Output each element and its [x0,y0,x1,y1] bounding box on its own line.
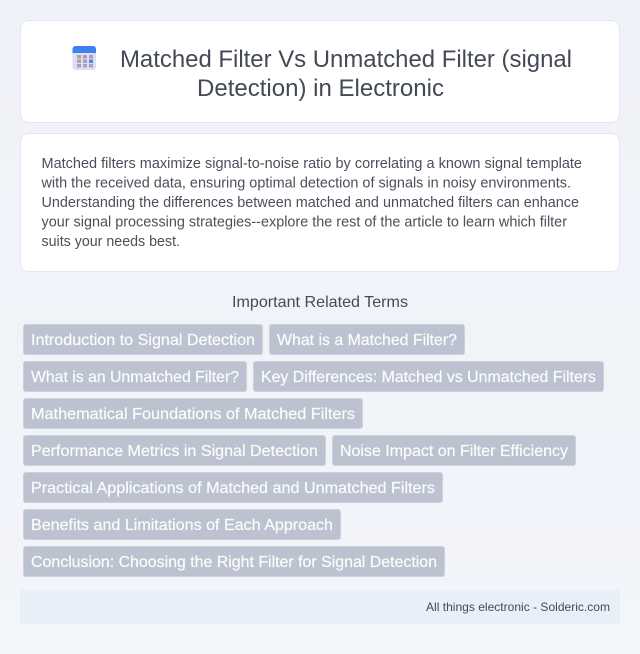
tag: noise impact [332,436,576,466]
heading: important related terms: Important Related Terms [232,294,408,311]
tag: conclusion [24,546,444,576]
tag: benefits and limitations [24,510,340,540]
title [120,46,572,102]
footer [20,590,620,624]
summary text [40,156,582,250]
tag: key differences [254,362,604,392]
tag: unmatched filter: What is an Unmatched Filter? [31,369,239,386]
summary text: Matched filters maximize signal-to-noise ratio by correlating a known signal template [42,156,582,172]
summary text: Understanding the differences between matched and unmatched filters can enhance [42,195,579,211]
tag: performance metrics: Performance Metrics in Signal Detection [31,443,318,460]
tag: matched filter [270,324,464,354]
tag: matched filter: What is a Matched Filter? [277,332,457,349]
title: Matched Filter Vs Unmatched Filter (signal [120,46,572,73]
tag: practical applications [24,472,442,502]
tag: conclusion: Conclusion: Choosing the Right Filter for Signal Detection [31,554,437,571]
title: Detection) in Electronic [197,75,444,102]
tag list [24,324,604,576]
summary text: with the received data, ensuring optimal detection of signals in noisy environments. [40,176,571,192]
tag: introduction [24,324,262,354]
summary text: your signal processing strategies--explore the rest of the article to learn which filter [42,214,567,230]
tag: noise impact: Noise Impact on Filter Efficiency [340,443,568,460]
tag: benefits and limitations: Benefits and Limitations of Each Approach [31,517,333,534]
tag: practical applications: Practical Applications of Matched and Unmatched Filters [31,480,435,497]
summary text: suits your needs best. [42,234,180,250]
tag: mathematical foundations: Mathematical Foundations of Matched Filters [31,406,355,423]
icon: calendar [72,46,96,70]
panel: title card [20,20,620,122]
tag: unmatched filter [24,362,246,392]
tag: key differences: Key Differences: Matched vs Unmatched Filters [261,369,596,386]
tag: mathematical foundations [24,398,362,428]
tag: performance metrics [24,436,326,466]
tag: introduction: Introduction to Signal Detection [31,332,255,349]
footer: All things electronic - Solderic.com [426,600,610,614]
panel: summary card [20,134,620,272]
